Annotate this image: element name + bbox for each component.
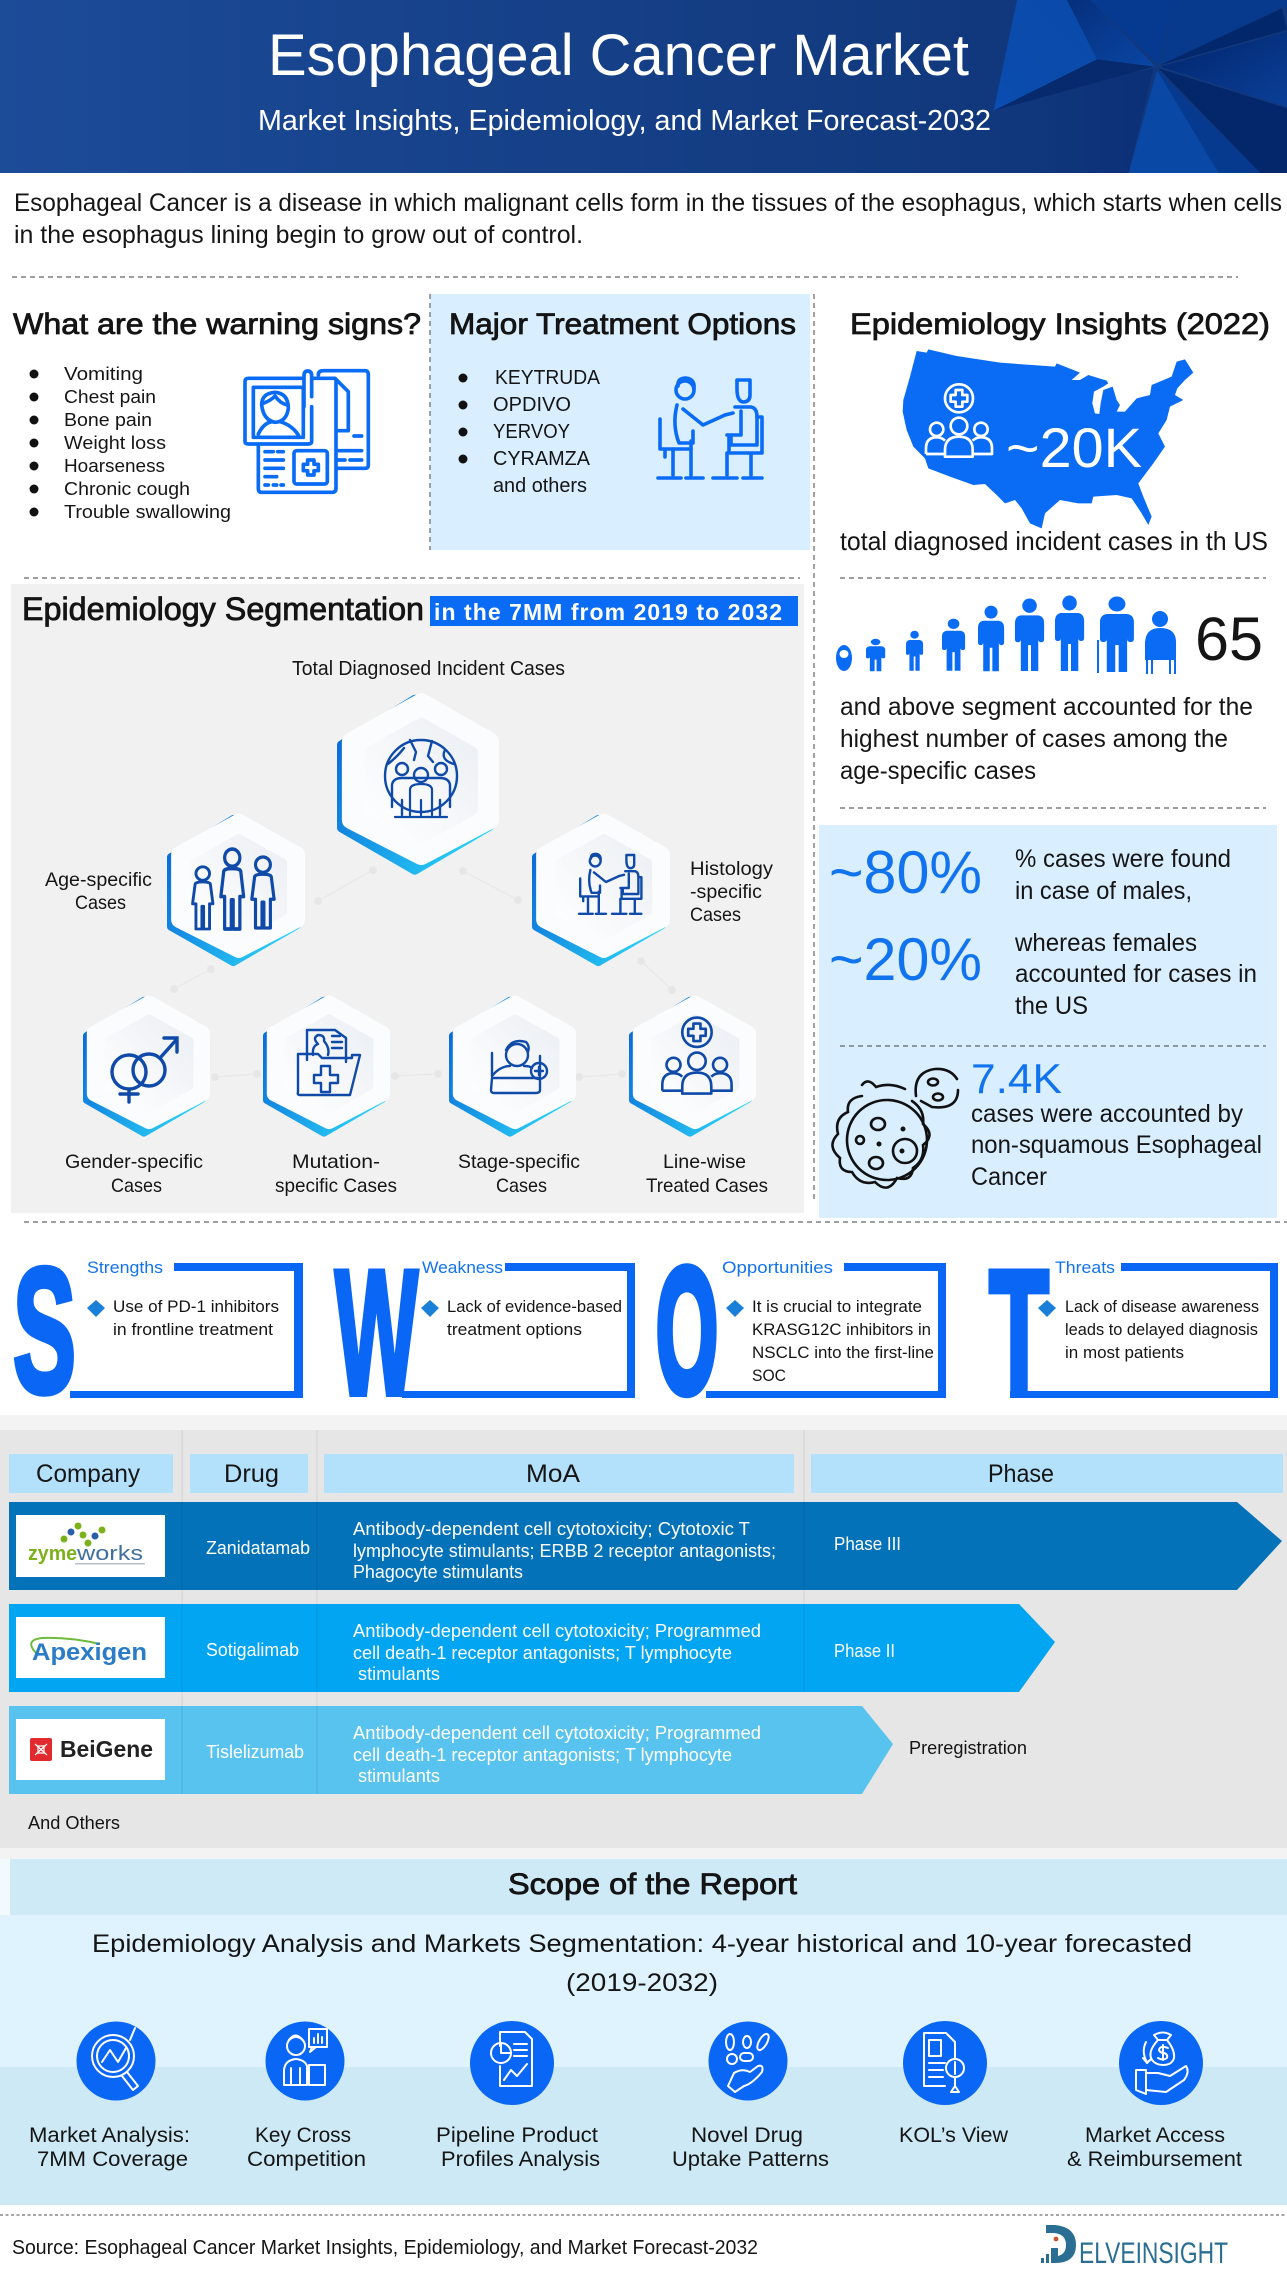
label: line-wise treated bbox=[646, 1151, 768, 1197]
logo: DelveInsight: ELVEINSIGHT bbox=[1079, 2237, 1228, 2270]
icon: medical folder bbox=[298, 1030, 360, 1095]
label: stage-specific: Cases bbox=[496, 1175, 547, 1197]
row: Apexigen Sotigalimab: Sotigalimab bbox=[206, 1640, 299, 1660]
stat: 20%: ~20% bbox=[829, 926, 982, 993]
row: Apexigen Sotigalimab: cell death-1 receptor antagonists; T lymphocyte bbox=[353, 1643, 732, 1663]
SWOT: strengths: Strengths bbox=[87, 1258, 163, 1277]
text: males: in case of males, bbox=[1015, 877, 1192, 905]
item: novel drug uptake: Uptake Patterns bbox=[672, 2148, 829, 2171]
label: age-specific bbox=[45, 869, 152, 914]
SWOT: threats: leads to delayed diagnosis bbox=[1065, 1321, 1258, 1339]
label: gender-specific: Gender-specific bbox=[65, 1151, 203, 1173]
item: market analysis bbox=[29, 2022, 190, 2171]
hexagon: mutation-specific bbox=[267, 1001, 382, 1133]
list: treatment options: and others bbox=[493, 475, 587, 497]
item: pipeline product profiles: Profiles Analysis bbox=[441, 2148, 600, 2171]
label: gender-specific bbox=[65, 1151, 203, 1197]
label: histology-specific: Histology bbox=[690, 858, 773, 880]
label: histology-specific bbox=[690, 858, 773, 926]
SWOT: opportunities: SOC bbox=[752, 1367, 786, 1385]
caption: diagnosed incident cases: total diagnosed incident cases in th US bbox=[840, 526, 1268, 556]
item: key cross competition bbox=[247, 2022, 366, 2171]
title: Esophageal Cancer Market bbox=[268, 23, 969, 88]
SWOT: weakness: W bbox=[335, 1233, 418, 1432]
SWOT: opportunities: NSCLC into the first-line bbox=[752, 1344, 934, 1362]
logo: Apexigen bbox=[16, 1617, 165, 1678]
SWOT: opportunities: It is crucial to integrate bbox=[752, 1298, 922, 1316]
text: males bbox=[1015, 845, 1231, 905]
row: Zymeworks Zanidatamab: Phagocyte stimulants bbox=[353, 1562, 523, 1582]
logo: zymeworks: works bbox=[76, 1543, 143, 1565]
table header row bbox=[9, 1454, 1283, 1493]
icon: cross and people bbox=[662, 1018, 732, 1094]
stat: 80%: ~80% bbox=[829, 839, 982, 906]
item: KOL's view bbox=[899, 2021, 1009, 2147]
SWOT: threats: in most patients bbox=[1065, 1344, 1184, 1362]
label: age-specific: Age-specific bbox=[45, 869, 152, 891]
item: market analysis: Market Analysis: bbox=[29, 2124, 190, 2147]
text: non-squamous bbox=[971, 1100, 1262, 1191]
SWOT section bbox=[13, 1231, 1278, 1432]
item: market access bbox=[1067, 2021, 1242, 2171]
list: warning signs bbox=[30, 364, 231, 522]
hexagon: histology-specific bbox=[536, 819, 662, 962]
logo: zymeworks bbox=[16, 1515, 165, 1577]
SWOT: opportunities bbox=[656, 1231, 946, 1430]
row: Apexigen Sotigalimab: Antibody-dependent cell cytotoxicity; Programmed bbox=[353, 1621, 761, 1641]
SWOT: threats bbox=[989, 1233, 1278, 1432]
row: BeiGene Tislelizumab bbox=[9, 1706, 1027, 1794]
panel: gender and non-squamous stats bbox=[819, 825, 1277, 1218]
heading: segmentation: Epidemiology Segmentation bbox=[22, 591, 424, 627]
label: stage-specific: Stage-specific bbox=[458, 1151, 580, 1173]
text: non-squamous: non-squamous Esophageal bbox=[971, 1131, 1262, 1159]
panel: epidemiology insights bbox=[840, 308, 1270, 556]
item: novel drug uptake: Novel Drug bbox=[691, 2124, 803, 2147]
list: treatment options: KEYTRUDA bbox=[495, 367, 601, 389]
label: histology-specific: Cases bbox=[690, 904, 741, 926]
item: market access: & Reimbursement bbox=[1067, 2148, 1242, 2171]
row: Zymeworks Zanidatamab bbox=[9, 1502, 1282, 1590]
logo: BeiGene: BeiGene bbox=[60, 1736, 153, 1762]
icon: cancer cell bbox=[832, 1069, 958, 1188]
text: non-squamous: Cancer bbox=[971, 1163, 1047, 1191]
text: age segment: age-specific cases bbox=[840, 757, 1036, 785]
heading: scope: Scope of the Report bbox=[508, 1868, 798, 1901]
list: warning signs: Weight loss bbox=[64, 433, 166, 453]
text: females: accounted for cases in bbox=[1015, 960, 1257, 988]
row: Zymeworks Zanidatamab: lymphocyte stimulants; ERBB 2 receptor antagonists; bbox=[353, 1541, 776, 1561]
list: warning signs: Vomiting bbox=[64, 364, 143, 384]
label: gender-specific: Cases bbox=[111, 1175, 162, 1197]
intro text bbox=[14, 189, 1282, 249]
header banner bbox=[0, 0, 1287, 173]
subtitle: Market Insights, Epidemiology, and Market Forecast-2032 bbox=[258, 105, 991, 137]
hexagon: stage-specific bbox=[453, 1001, 568, 1133]
list: warning signs: Chronic cough bbox=[64, 479, 190, 499]
pipeline table bbox=[0, 1415, 1287, 1859]
SWOT: opportunities: Opportunities bbox=[722, 1258, 833, 1277]
row: Apexigen Sotigalimab bbox=[9, 1604, 1055, 1692]
text: age segment: and above segment accounted for the bbox=[840, 693, 1253, 721]
stat: 65: 65 bbox=[1195, 605, 1263, 673]
SWOT: opportunities: KRASG12C inhibitors in bbox=[752, 1321, 931, 1339]
table header row: Phase bbox=[988, 1460, 1054, 1488]
text: scope description: (2019-2032) bbox=[566, 1969, 718, 1997]
list: warning signs: Trouble swallowing bbox=[64, 502, 231, 522]
list: treatment options: YERVOY bbox=[493, 421, 570, 443]
icon: three people bbox=[193, 849, 274, 929]
item: key cross competition: Competition bbox=[247, 2148, 366, 2171]
SWOT: strengths: in frontline treatment bbox=[113, 1321, 273, 1339]
map: United States with 20K bbox=[903, 349, 1193, 528]
SWOT: weakness: treatment options bbox=[447, 1321, 582, 1339]
label: mutation-specific: specific Cases bbox=[275, 1175, 397, 1197]
text: females: whereas females bbox=[1014, 929, 1197, 957]
logo: DelveInsight bbox=[1041, 2225, 1228, 2270]
SWOT: threats: T bbox=[989, 1233, 1049, 1432]
list: treatment options: OPDIVO bbox=[493, 394, 571, 416]
logo: Apexigen: Apexigen bbox=[32, 1639, 147, 1666]
text: scope description bbox=[92, 1930, 1192, 1997]
list: warning signs: Chest pain bbox=[64, 387, 156, 407]
item: novel drug uptake bbox=[672, 2022, 829, 2171]
logo: zymeworks: zyme bbox=[28, 1543, 77, 1565]
icon: doctor and patient bbox=[579, 854, 641, 914]
row: BeiGene Tislelizumab: cell death-1 receptor antagonists; T lymphocyte bbox=[353, 1745, 732, 1765]
item: market access: Market Access bbox=[1085, 2124, 1225, 2147]
text: age segment: highest number of cases among the bbox=[840, 725, 1228, 753]
stat: 7.4K: 7.4K bbox=[971, 1055, 1062, 1102]
stat: 20K: ~20K bbox=[1006, 416, 1142, 479]
heading: warning signs: What are the warning signs? bbox=[13, 308, 421, 341]
SWOT: weakness bbox=[335, 1233, 635, 1432]
table header row: Drug bbox=[224, 1460, 279, 1488]
note: and others: And Others bbox=[28, 1813, 120, 1833]
intro text: in the esophagus lining begin to grow out of control. bbox=[14, 221, 583, 249]
item: pipeline product profiles bbox=[436, 2021, 600, 2171]
SWOT: weakness: Lack of evidence-based bbox=[447, 1298, 622, 1316]
hexagon: age-specific bbox=[171, 819, 297, 962]
SWOT: strengths: Use of PD-1 inhibitors bbox=[113, 1298, 279, 1316]
list: warning signs: Bone pain bbox=[64, 410, 152, 430]
text: females: the US bbox=[1015, 992, 1088, 1020]
table header row: MoA bbox=[526, 1460, 580, 1488]
list: treatment options bbox=[458, 367, 601, 497]
item: key cross competition: Key Cross bbox=[255, 2124, 351, 2147]
text: females bbox=[1014, 929, 1257, 1020]
icon: people with medical cross bbox=[926, 384, 992, 457]
heading: treatment options: Major Treatment Options bbox=[449, 308, 796, 341]
SWOT: opportunities: O bbox=[656, 1231, 718, 1430]
intro text: Esophageal Cancer is a disease in which malignant cells form in the tissues of the esophagus, which starts when cells bbox=[14, 189, 1282, 217]
icon: gender symbols bbox=[112, 1038, 177, 1102]
panel: major treatment options bbox=[430, 294, 810, 550]
item: pipeline product profiles: Pipeline Product bbox=[436, 2124, 598, 2147]
source line: Source: Esophageal Cancer Market Insights, Epidemiology, and Market Forecast-2032 bbox=[12, 2237, 758, 2259]
hexagon: gender-specific bbox=[87, 1001, 202, 1133]
row: Apexigen Sotigalimab: Phase II bbox=[834, 1641, 895, 1661]
label: age-specific: Cases bbox=[75, 892, 126, 914]
panel: scope of the report bbox=[0, 1859, 1287, 2205]
SWOT: strengths bbox=[13, 1231, 303, 1430]
SWOT: weakness: Weakness bbox=[422, 1258, 503, 1277]
text: scope description: Epidemiology Analysis and Markets Segmentation: 4-year historical and 10-year forecasted bbox=[92, 1930, 1192, 1958]
heading tag: 7MM period: in the 7MM from 2019 to 2032 bbox=[434, 599, 782, 625]
text: non-squamous: cases were accounted by bbox=[971, 1100, 1243, 1128]
SWOT: strengths: S bbox=[13, 1231, 76, 1430]
text: males: % cases were found bbox=[1015, 845, 1231, 873]
icon: ages row of figures bbox=[836, 596, 1176, 674]
label: total diagnosed: Total Diagnosed Incident Cases bbox=[292, 658, 565, 680]
item: KOL's view: KOL’s View bbox=[899, 2124, 1009, 2147]
row: Zymeworks Zanidatamab: Antibody-dependent cell cytotoxicity; Cytotoxic T bbox=[353, 1519, 750, 1539]
label: mutation-specific: Mutation- bbox=[292, 1151, 380, 1173]
panel: age stat bbox=[836, 596, 1263, 785]
label: stage-specific bbox=[458, 1151, 580, 1197]
table header row: Company bbox=[36, 1460, 140, 1488]
row: BeiGene Tislelizumab: stimulants bbox=[358, 1766, 440, 1786]
SWOT: threats: Threats bbox=[1055, 1258, 1115, 1277]
panel: epidemiology segmentation bbox=[11, 584, 804, 1213]
panel: warning signs bbox=[13, 308, 421, 522]
label: line-wise treated: Treated Cases bbox=[646, 1175, 768, 1197]
banner: faceted star decoration bbox=[987, 0, 1287, 173]
row: BeiGene Tislelizumab: Preregistration bbox=[909, 1738, 1027, 1758]
icon: patient in bed bbox=[491, 1041, 547, 1093]
label: line-wise treated: Line-wise bbox=[663, 1151, 746, 1173]
list: treatment options: CYRAMZA bbox=[493, 448, 591, 470]
SWOT: threats: Lack of disease awareness bbox=[1065, 1298, 1259, 1316]
row: Zymeworks Zanidatamab: Zanidatamab bbox=[206, 1538, 310, 1558]
hexagon: line-wise treated bbox=[633, 1001, 748, 1133]
label: mutation-specific bbox=[275, 1151, 397, 1197]
heading: epidemiology insights: Epidemiology Insights (2022) bbox=[850, 308, 1270, 341]
row: BeiGene Tislelizumab: Tislelizumab bbox=[206, 1742, 304, 1762]
row: Zymeworks Zanidatamab: Phase III bbox=[834, 1534, 901, 1554]
hexagon: total diagnosed bbox=[342, 700, 489, 870]
icon: doctor and patient bbox=[658, 378, 762, 478]
item: market analysis: 7MM Coverage bbox=[37, 2148, 188, 2171]
text: age segment bbox=[840, 693, 1253, 785]
row: BeiGene Tislelizumab: Antibody-dependent cell cytotoxicity; Programmed bbox=[353, 1723, 761, 1743]
list: warning signs: Hoarseness bbox=[64, 456, 165, 476]
row: Apexigen Sotigalimab: stimulants bbox=[358, 1664, 440, 1684]
label: histology-specific: -specific bbox=[690, 881, 762, 903]
icon: patient record documents bbox=[245, 371, 368, 492]
icon: globe and people bbox=[385, 740, 457, 817]
logo: BeiGene bbox=[16, 1719, 165, 1780]
